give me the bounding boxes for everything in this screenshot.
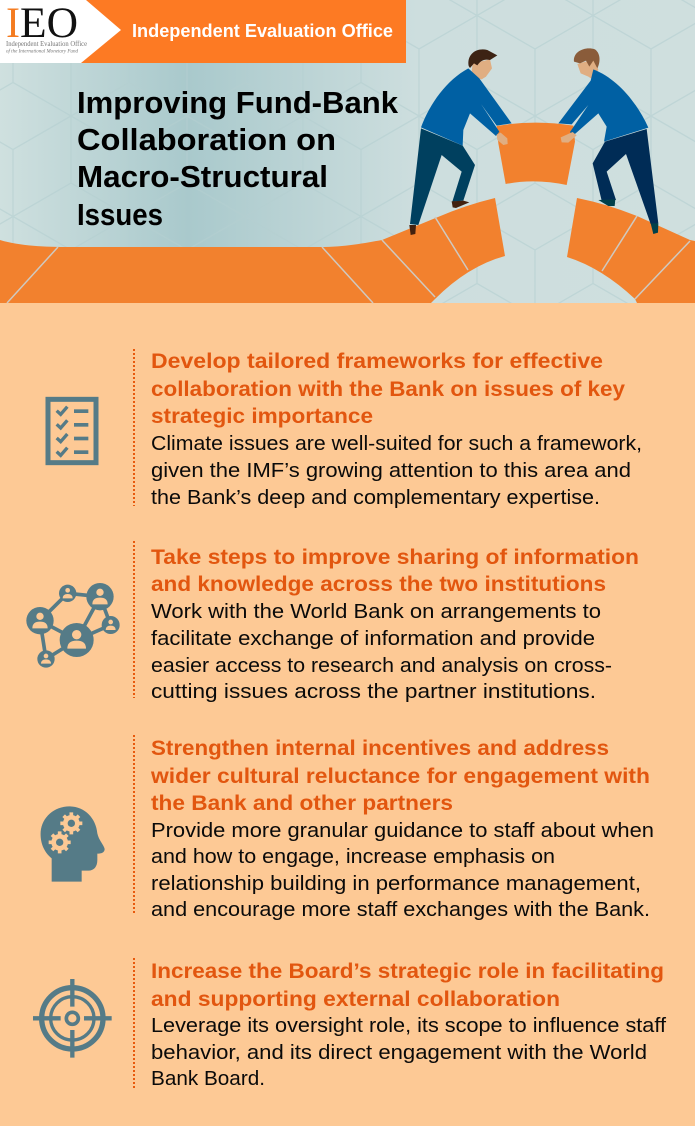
dotted divider [133, 735, 135, 915]
title [77, 85, 399, 232]
hexagon pattern [0, 0, 695, 303]
icon: checklist [48, 399, 96, 463]
text block: wider cultural reluctance for engagement with [150, 764, 650, 788]
text block [151, 349, 642, 509]
orange banner [0, 0, 406, 63]
text block: the Bank’s deep and complementary expertise. [151, 486, 600, 509]
IEO logo [6, 0, 87, 54]
top banner [0, 0, 406, 63]
text block: relationship building in performance management, [151, 872, 641, 895]
text block: Develop tailored frameworks for effective [151, 349, 603, 373]
icon: head with gears [41, 806, 105, 882]
dotted divider [133, 958, 135, 1090]
header illustration panel [0, 0, 695, 303]
title: Issues [77, 197, 163, 232]
text block: the Bank and other partners [151, 791, 453, 815]
text block: strategic importance [151, 404, 373, 428]
text block: and knowledge across the two institutions [151, 572, 606, 596]
banner label: Independent Evaluation Office [132, 21, 393, 41]
orange bridge arc [0, 198, 695, 303]
text block [151, 959, 666, 1090]
illustration: two people placing bridge stone [409, 48, 658, 235]
title: Macro-Structural [77, 159, 328, 194]
right person [558, 48, 658, 234]
text block [151, 545, 639, 703]
text block: Take steps to improve sharing of information [151, 545, 639, 569]
text block: easier access to research and analysis on cross- [151, 654, 612, 677]
left person [409, 49, 512, 235]
text block: Increase the Board’s strategic role in facilitating [151, 959, 664, 983]
text block: behavior, and its direct engagement with the World [151, 1041, 647, 1064]
header background [0, 0, 695, 303]
recommendation 4 [33, 958, 666, 1090]
text block: Leverage its oversight role, its scope to influence staff [151, 1014, 666, 1037]
text block: and how to engage, increase emphasis on [151, 845, 555, 868]
title: Improving Fund-Bank [77, 85, 399, 120]
text block: given the IMF’s growing attention to this area and [151, 459, 631, 482]
text block [150, 736, 654, 921]
icon: target [33, 979, 112, 1058]
text block: and supporting external collaboration [151, 987, 560, 1011]
IEO logo: of the International Monetary Fund [6, 50, 78, 54]
recommendation 3 [41, 735, 654, 921]
text block: collaboration with the Bank on issues of key [151, 377, 625, 401]
recommendation 2 [26, 541, 639, 703]
text block: Strengthen internal incentives and address [151, 736, 609, 760]
text block: cutting issues across the partner institutions. [151, 680, 596, 703]
text block: and encourage more staff exchanges with the Bank. [151, 898, 650, 921]
text block: Bank Board. [151, 1067, 265, 1090]
bridge keystone [497, 123, 575, 185]
IEO logo: Independent Evaluation Office [6, 40, 87, 48]
text block: Provide more granular guidance to staff about when [151, 819, 654, 842]
dotted divider [133, 349, 135, 506]
white logo plate [0, 0, 121, 63]
IEO logo: EO [20, 0, 78, 47]
gear lower [49, 831, 71, 853]
icon: people network [26, 583, 120, 668]
text block: facilitate exchange of information and provide [151, 627, 595, 650]
gear upper [60, 812, 82, 834]
title: Collaboration on [77, 122, 336, 157]
IEO logo: I [6, 0, 20, 47]
recommendation 1 [48, 349, 642, 509]
text block: Work with the World Bank on arrangements to [151, 600, 601, 623]
text block: Climate issues are well-suited for such a framework, [151, 432, 642, 455]
dotted divider [133, 541, 135, 698]
